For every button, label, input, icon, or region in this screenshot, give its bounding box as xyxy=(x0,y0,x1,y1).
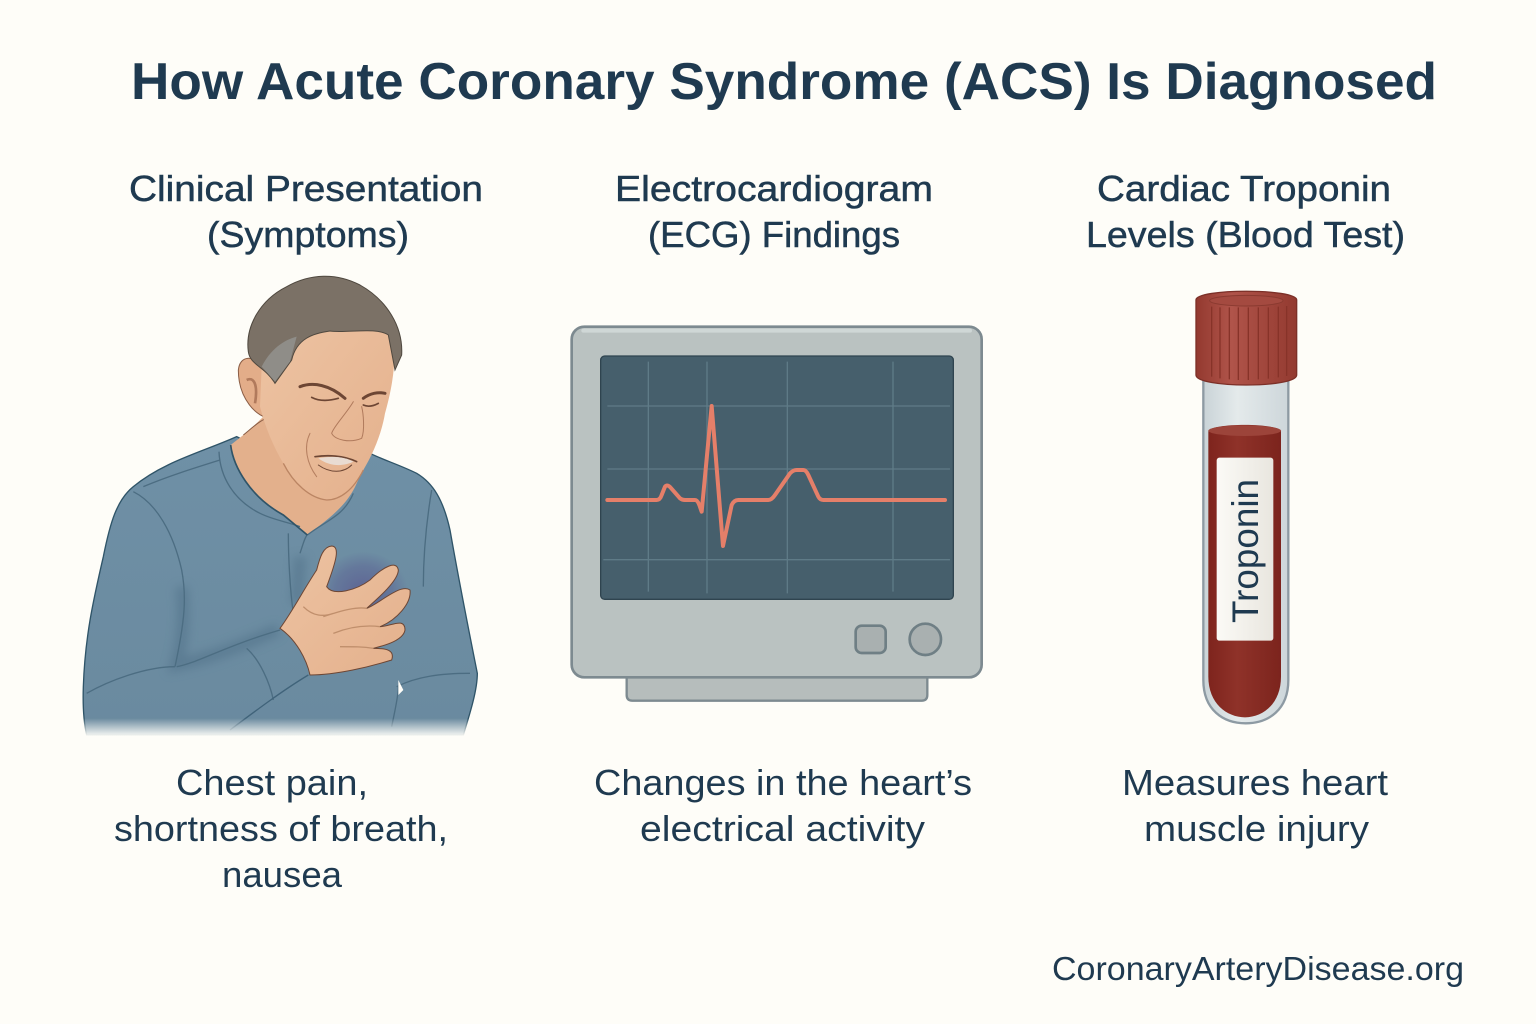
screen xyxy=(601,356,953,599)
caption: troponin: muscle injury xyxy=(1144,808,1369,849)
round knob xyxy=(910,624,941,655)
illustration: blood test tube xyxy=(1196,291,1297,723)
heading: ECG findings: (ECG) Findings xyxy=(648,214,900,255)
heading: ECG findings xyxy=(615,168,933,255)
label text: Troponin xyxy=(1225,479,1266,623)
caption: troponin: Measures heart xyxy=(1122,762,1388,803)
heading: cardiac troponin: Levels (Blood Test) xyxy=(1086,214,1405,255)
shirt fade xyxy=(77,718,483,737)
label xyxy=(1217,458,1273,641)
caption: ECG: Changes in the heart’s xyxy=(594,762,972,803)
ear xyxy=(238,358,272,418)
hair xyxy=(248,276,402,383)
panel: clinical presentation xyxy=(77,168,483,895)
cap xyxy=(1196,291,1297,385)
shirt xyxy=(83,437,477,735)
ECG trace xyxy=(607,406,945,546)
facial features xyxy=(300,384,385,477)
panel: ECG findings xyxy=(572,168,982,849)
heading: ECG findings: Electrocardiogram xyxy=(615,168,933,209)
caption: symptoms: nausea xyxy=(222,854,343,895)
monitor stand xyxy=(627,675,927,701)
heading: clinical presentation: (Symptoms) xyxy=(207,214,409,255)
title: How Acute Coronary Syndrome (ACS) Is Diagnosed xyxy=(131,53,1437,111)
blood xyxy=(1208,425,1281,717)
caption: troponin xyxy=(1122,762,1388,849)
shirt folds xyxy=(87,460,470,727)
square button xyxy=(856,626,886,653)
illustration: ECG monitor xyxy=(572,327,982,701)
face xyxy=(260,330,394,500)
illustration: man clutching chest xyxy=(77,276,483,737)
caption: symptoms: shortness of breath, xyxy=(114,808,448,849)
grid xyxy=(603,362,950,593)
caption: ECG: electrical activity xyxy=(640,808,925,849)
glass tube xyxy=(1203,380,1288,723)
hand xyxy=(280,546,410,675)
jaw line xyxy=(283,463,363,500)
heading: cardiac troponin xyxy=(1086,168,1405,255)
shirt shading xyxy=(176,557,300,665)
monitor body xyxy=(572,327,982,677)
heading: clinical presentation: Clinical Presentation xyxy=(129,168,483,209)
panel: cardiac troponin xyxy=(1086,168,1405,849)
caption: ECG xyxy=(594,762,972,849)
heading: cardiac troponin: Cardiac Troponin xyxy=(1097,168,1391,209)
chest bruise xyxy=(318,552,408,635)
heading: clinical presentation xyxy=(129,168,483,255)
source credit: CoronaryArteryDisease.org xyxy=(1052,950,1464,987)
neck xyxy=(231,403,372,535)
caption: symptoms xyxy=(114,762,448,895)
caption: symptoms: Chest pain, xyxy=(176,762,368,803)
